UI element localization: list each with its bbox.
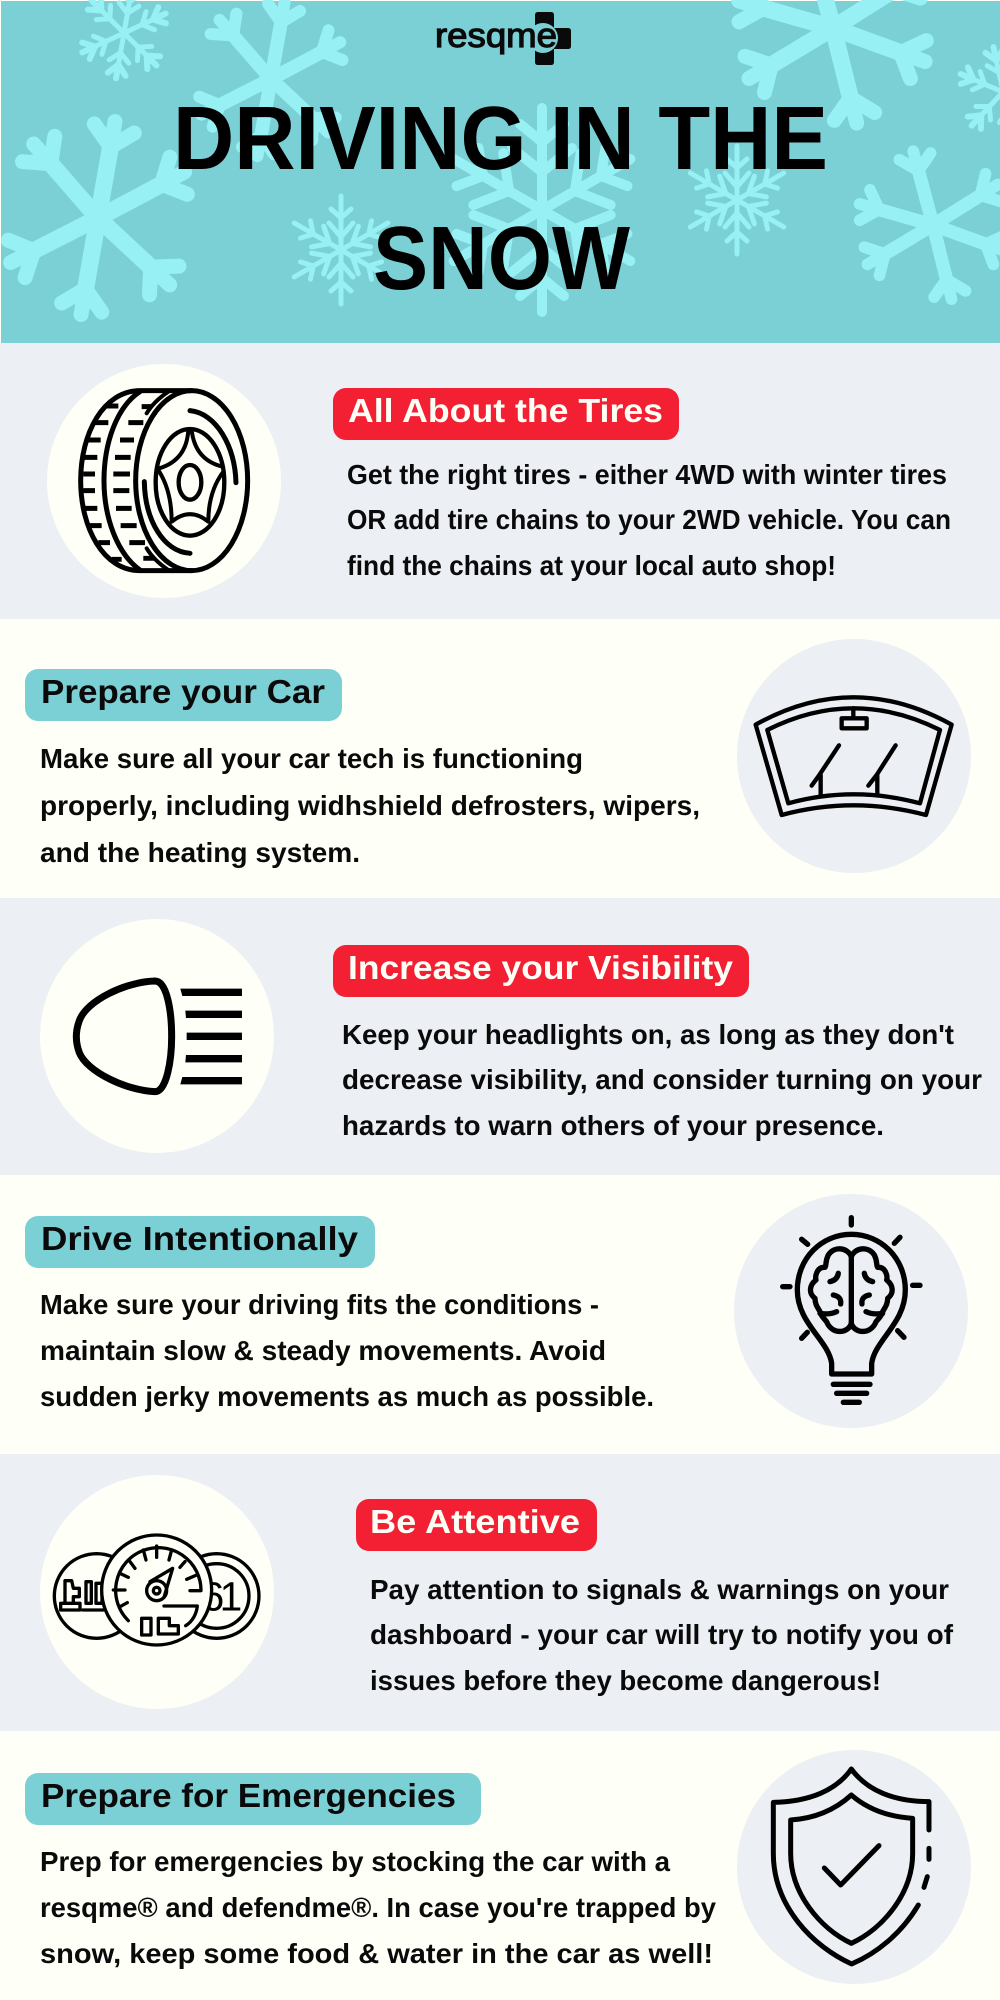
snowflake pattern: [1, 0, 1000, 318]
text: drive: maintain slow & steady movements. Avoid: [40, 1335, 606, 1366]
text: prepare car: Make sure all your car tech is functioning: [40, 743, 583, 774]
heading pill: Be Attentive: Be Attentive: [370, 1503, 580, 1540]
text: emergencies: [40, 1846, 716, 1969]
text: prepare car: and the heating system.: [40, 837, 360, 868]
heading pill: Increase your Visibility: Increase your Visibility: [348, 949, 734, 986]
text: visibility: decrease visibility, and consider turning on your: [342, 1064, 982, 1095]
text: drive: Make sure your driving fits the conditions -: [40, 1289, 599, 1320]
text: visibility: Keep your headlights on, as long as they don't: [342, 1019, 954, 1050]
panel: drive intentionally: [0, 1175, 1000, 1454]
text: emergencies: resqme® and defendme®. In case you're trapped by: [40, 1892, 716, 1923]
title: SNOW: [373, 209, 630, 309]
heading pill: Be Attentive: [356, 1499, 597, 1551]
heading pill: All About the Tires: All About the Tires: [348, 392, 663, 429]
text: emergencies: Prep for emergencies by stocking the car with a: [40, 1846, 670, 1877]
heading pill: Drive Intentionally: Drive Intentionally: [41, 1220, 359, 1257]
panel: be attentive: [0, 1454, 1000, 1731]
panel: header: [1, 0, 1000, 343]
heading pill: Increase your Visibility: [333, 945, 749, 997]
heading pill: Prepare for Emergencies: [25, 1773, 481, 1825]
logo: resqme: resqme: [435, 17, 557, 55]
panel: prepare your car: [0, 619, 1000, 898]
icon: lightbulb with brain: [734, 1194, 968, 1428]
icon: tire: [47, 364, 281, 598]
text: attentive: issues before they become dangerous!: [370, 1665, 881, 1696]
heading pill: Drive Intentionally: [25, 1216, 375, 1268]
text: prepare car: [40, 743, 700, 868]
icon: shield with check: [737, 1750, 971, 1984]
heading pill: Prepare your Car: Prepare your Car: [41, 673, 325, 710]
icon: dashboard gauges: [40, 1475, 274, 1709]
heading pill: Prepare for Emergencies: Prepare for Emergencies: [41, 1777, 456, 1814]
panel: all about the tires: [0, 343, 1000, 619]
title: DRIVING IN THE: [173, 89, 828, 189]
text: drive: sudden jerky movements as much as possible.: [40, 1381, 654, 1412]
text: tires: find the chains at your local auto shop!: [347, 550, 836, 581]
icon: dashboard gauges: 61: [202, 1573, 241, 1619]
panel: prepare for emergencies: [0, 1731, 1000, 2000]
logo: resqme: [435, 12, 571, 65]
heading pill: All About the Tires: [333, 388, 679, 440]
icon: windshield: [737, 639, 971, 873]
text: attentive: dashboard - your car will try to notify you of: [370, 1619, 954, 1650]
text: drive: [40, 1289, 654, 1412]
text: prepare car: properly, including widhshield defrosters, wipers,: [40, 790, 700, 821]
text: attentive: [370, 1574, 954, 1696]
text: attentive: Pay attention to signals & warnings on your: [370, 1574, 949, 1605]
icon: headlight: [40, 919, 274, 1153]
text: tires: Get the right tires - either 4WD with winter tires: [347, 459, 947, 490]
text: tires: [347, 459, 951, 581]
text: visibility: hazards to warn others of your presence.: [342, 1110, 884, 1141]
heading pill: Prepare your Car: [25, 669, 342, 721]
text: visibility: [342, 1019, 982, 1141]
panel: increase your visibility: [0, 898, 1000, 1175]
title: [173, 89, 828, 309]
text: emergencies: snow, keep some food & water in the car as well!: [40, 1938, 713, 1969]
text: tires: OR add tire chains to your 2WD vehicle. You can: [347, 504, 951, 535]
